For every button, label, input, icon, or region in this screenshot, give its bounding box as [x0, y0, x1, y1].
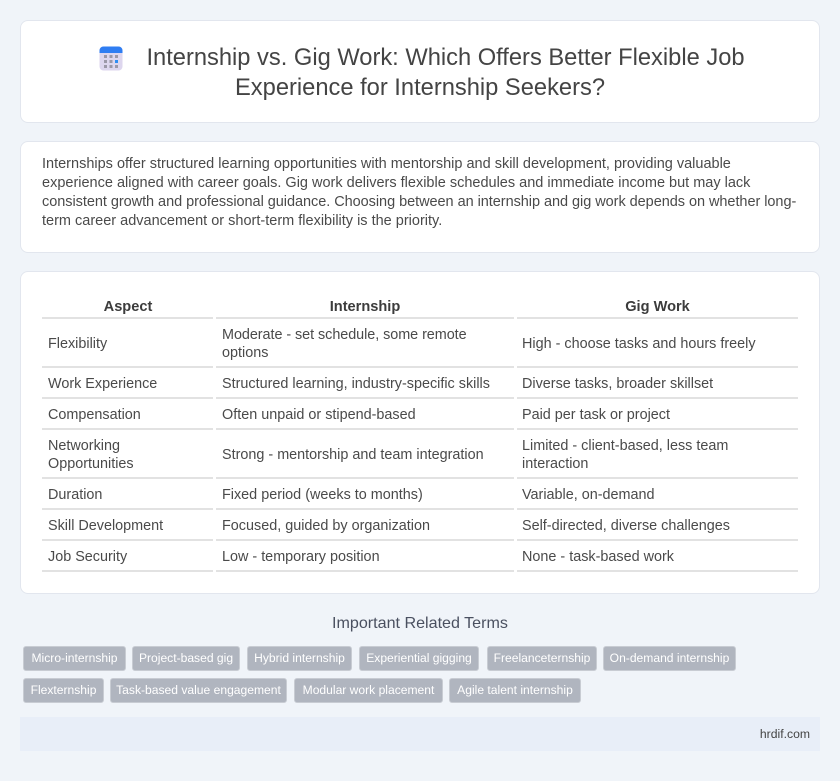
- tags: related terms: [23, 646, 736, 703]
- row: Work Experience: [48, 376, 714, 392]
- row: Compensation: Often unpaid or stipend-based: [222, 407, 416, 423]
- tags: related terms: Experiential gigging: [366, 651, 472, 665]
- header card: [20, 20, 820, 123]
- tags: related terms: Micro-internship: [31, 651, 118, 665]
- icon: calendar: [100, 46, 122, 70]
- tags: related terms: Hybrid internship: [254, 651, 345, 665]
- row: Flexibility: [48, 327, 756, 361]
- row: Compensation: Compensation: [48, 407, 141, 423]
- table header: Internship: [330, 299, 400, 315]
- row: Duration: Duration: [48, 487, 102, 503]
- footer source: hrdif.com: [760, 727, 810, 741]
- row: Compensation: [48, 407, 670, 423]
- row: Skill Development: Skill Development: [48, 518, 163, 534]
- panel: description: [20, 141, 820, 253]
- title: Experience for Internship Seekers?: [235, 75, 605, 101]
- tags: related terms: Project-based gig: [139, 651, 233, 665]
- tags: related terms: Flexternship: [31, 683, 96, 697]
- heading: Important Related Terms: Important Related Terms: [332, 614, 508, 632]
- row: Flexibility: High - choose tasks and hours freely: [522, 336, 756, 352]
- row: Networking Opportunities: Strong - mentorship and team integration: [222, 447, 484, 463]
- row: Work Experience: Structured learning, industry-specific skills: [222, 376, 490, 392]
- text block: description: experience aligned with career goals. Gig work delivers flexible schedules and immediate income but may lack: [42, 175, 750, 191]
- row: Flexibility: options: [222, 345, 268, 361]
- table header: Gig Work: [625, 299, 690, 315]
- row: Job Security: Low - temporary position: [222, 549, 380, 565]
- text block: description: [42, 156, 796, 229]
- row: Compensation: Paid per task or project: [522, 407, 670, 423]
- text block: description: consistent growth and professional guidance. Choosing between an internship and gig work depends on whether long-: [42, 194, 796, 210]
- title: [146, 45, 745, 101]
- row: Duration: Variable, on-demand: [522, 487, 655, 503]
- row: Duration: [48, 487, 655, 503]
- tags: related terms: Task-based value engagement: [116, 683, 281, 697]
- row: Work Experience: Diverse tasks, broader skillset: [522, 376, 713, 392]
- tags: related terms: Freelanceternship: [494, 651, 590, 665]
- row: Duration: Fixed period (weeks to months): [222, 487, 423, 503]
- tags: related terms: On-demand internship: [610, 651, 729, 665]
- tags: related terms: Modular work placement: [303, 683, 434, 697]
- row: Job Security: [48, 549, 674, 565]
- row: Networking Opportunities: [48, 438, 728, 472]
- row: Job Security: None - task-based work: [522, 549, 674, 565]
- tags: related terms: Agile talent internship: [457, 683, 573, 697]
- title: Internship vs. Gig Work: Which Offers Better Flexible Job: [146, 45, 745, 71]
- row: Flexibility: Moderate - set schedule, some remote: [222, 327, 467, 343]
- panel: comparison table: [20, 271, 820, 594]
- footer: [20, 717, 820, 751]
- row: Flexibility: Flexibility: [48, 336, 107, 352]
- row: Skill Development: [48, 518, 730, 534]
- row: Networking Opportunities: Opportunities: [48, 456, 134, 472]
- table header: [104, 299, 690, 315]
- text block: description: Internships offer structured learning opportunities with mentorship and skill development, providing valuable: [42, 156, 731, 172]
- row: Networking Opportunities: Limited - client-based, less team: [522, 438, 728, 454]
- text block: description: term career advancement or short-term flexibility is the priority.: [42, 213, 442, 229]
- row: Networking Opportunities: Networking: [48, 438, 120, 454]
- table: [42, 299, 798, 572]
- row: Work Experience: Work Experience: [48, 376, 157, 392]
- row: Skill Development: Self-directed, diverse challenges: [522, 518, 730, 534]
- table header: Aspect: [104, 299, 152, 315]
- row: Job Security: Job Security: [48, 549, 127, 565]
- row: Networking Opportunities: interaction: [522, 456, 588, 472]
- row: Skill Development: Focused, guided by organization: [222, 518, 430, 534]
